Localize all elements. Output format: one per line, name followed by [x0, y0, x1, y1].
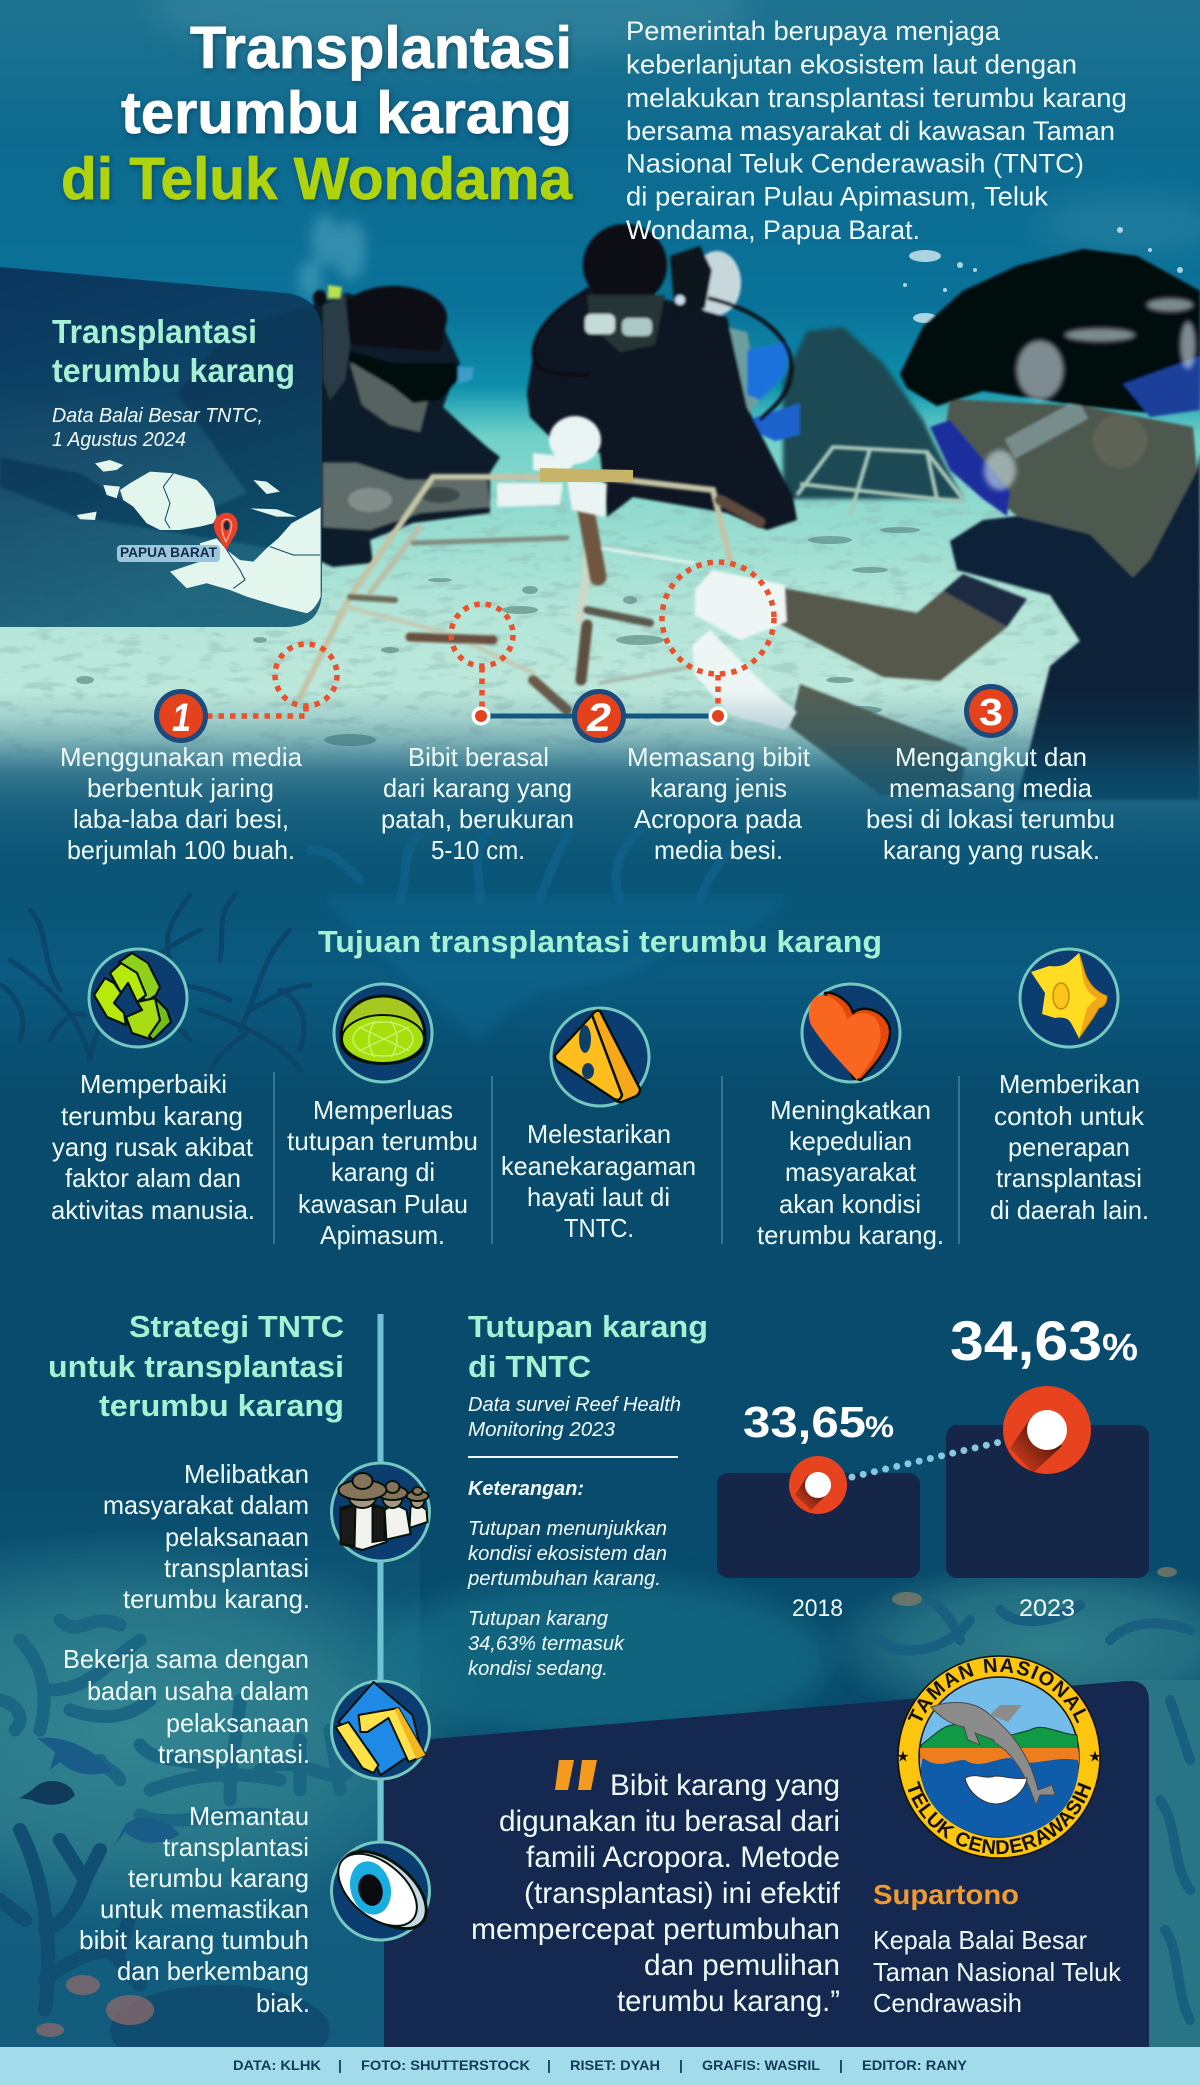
- step 4 text: besi di lokasi terumbu: [866, 804, 1115, 834]
- diver right: [780, 249, 1200, 800]
- icon: community people: [332, 1463, 430, 1561]
- coral cover notes: kondisi sedang.: [468, 1658, 608, 1680]
- goal 3 text: keanekaragaman: [501, 1151, 696, 1181]
- map of Papua: [77, 460, 321, 613]
- goal 4 text: terumbu karang.: [757, 1220, 944, 1250]
- coral silhouettes: upper band: [0, 830, 740, 1070]
- quote text: (transplantasi) ini efektif: [524, 1877, 841, 1910]
- goal 4 text: [757, 1095, 944, 1250]
- quote text: Bibit karang yang: [610, 1769, 840, 1802]
- strategy 3 text: untuk memastikan: [100, 1894, 309, 1924]
- strategy 2 text: pelaksanaan: [166, 1708, 309, 1738]
- footer credits: FOTO: SHUTTERSTOCK: [361, 2057, 530, 2073]
- footer credits: |: [338, 2057, 342, 2073]
- strategy 1 text: Melibatkan: [184, 1459, 309, 1489]
- quote text: mempercepat pertumbuhan: [471, 1913, 840, 1946]
- quote text: terumbu karang.”: [617, 1985, 840, 2018]
- coral cover notes: 34,63% termasuk: [468, 1633, 625, 1655]
- frame and corals: [300, 477, 760, 710]
- step 1 text: berjumlah 100 buah.: [67, 835, 295, 865]
- panel source note: [52, 405, 263, 451]
- intro paragraph: Nasional Teluk Cenderawasih (TNTC): [626, 148, 1084, 178]
- speaker name: Supartono: [873, 1879, 1019, 1910]
- strategy 1 text: transplantasi: [164, 1553, 309, 1583]
- speaker role: Kepala Balai Besar: [873, 1925, 1087, 1955]
- footer credits: DATA: KLHK: [233, 2057, 321, 2073]
- logo: Taman Nasional Teluk Cenderawasih: TAMAN NASIONAL: [908, 1658, 1086, 1724]
- right gloves: [692, 570, 797, 730]
- step 2 text: [381, 742, 574, 865]
- reef shape behind heading: [320, 895, 790, 1040]
- footer credits: RISET: DYAH: [570, 2057, 660, 2073]
- badge 1: [154, 689, 208, 743]
- strategy 3 text: terumbu karang: [128, 1863, 309, 1893]
- goal 1 text: Memperbaiki: [80, 1069, 227, 1099]
- badge 1: 1: [172, 696, 191, 740]
- goal 3 text: [501, 1119, 696, 1243]
- heading: coral cover: [468, 1309, 708, 1384]
- footer credits: |: [547, 2057, 551, 2073]
- dark coral bottom left: [0, 1830, 140, 2010]
- strategy 1 text: masyarakat dalam: [103, 1490, 309, 1520]
- marker 2018: [789, 1456, 847, 1514]
- underwater photo of divers: [0, 0, 1200, 900]
- icon: recycle: [89, 949, 187, 1047]
- title: terumbu karang: [121, 80, 572, 146]
- intro paragraph: [626, 16, 1127, 245]
- goal 1 text: aktivitas manusia.: [51, 1195, 255, 1225]
- quote text: famili Acropora. Metode: [526, 1841, 840, 1874]
- goal 3 text: Melestarikan: [527, 1119, 671, 1149]
- goal 2 text: karang di: [331, 1157, 435, 1187]
- white gloves: [497, 416, 607, 517]
- value 2023: 34,63: [950, 1309, 1102, 1372]
- panel heading: terumbu karang: [52, 352, 295, 389]
- trend dots: [852, 1442, 1000, 1477]
- strategy 3 text: transplantasi: [163, 1832, 309, 1862]
- coral cover source: Data survei Reef Health: [468, 1394, 681, 1416]
- panel source note: 1 Agustus 2024: [52, 429, 186, 451]
- goal 5 text: transplantasi: [996, 1163, 1142, 1193]
- icon: eye: [325, 1836, 440, 1944]
- goal 2 text: tutupan terumbu: [287, 1126, 478, 1156]
- goal 4 text: akan kondisi: [779, 1189, 921, 1219]
- heading: coral cover: di TNTC: [468, 1349, 591, 1384]
- coral: fan branches: [0, 1620, 350, 1821]
- intro paragraph: melakukan transplantasi terumbu karang: [626, 83, 1127, 113]
- intro paragraph: Wondama, Papua Barat.: [626, 215, 920, 245]
- goal 4 text: masyarakat: [785, 1157, 917, 1187]
- footer credits: EDITOR: RANY: [862, 2057, 968, 2073]
- speaker role: [873, 1925, 1122, 2018]
- year labels: 2023: [1019, 1595, 1075, 1622]
- map label: PAPUA BARAT: [120, 545, 218, 560]
- logo: Taman Nasional Teluk Cenderawasih: TELUK CENDERAWASIH: [908, 1780, 1092, 1854]
- heading: strategy: Strategi TNTC: [129, 1309, 344, 1344]
- step 4 text: karang yang rusak.: [883, 835, 1100, 865]
- coral cover notes: Keterangan:: [468, 1478, 584, 1500]
- strategy 2 text: badan usaha dalam: [87, 1676, 309, 1706]
- value 2018: %: [865, 1411, 894, 1444]
- badge 2: [572, 689, 626, 743]
- goal 3 text: hayati laut di: [527, 1182, 670, 1212]
- goal 2 text: [287, 1095, 478, 1250]
- badge 3: [964, 684, 1018, 738]
- quote text: dan pemulihan: [644, 1949, 840, 1982]
- title: di Teluk Wondama: [61, 146, 573, 212]
- step 3 text: media besi.: [654, 835, 783, 865]
- coral cover notes: Tutupan karang: [468, 1608, 608, 1630]
- step 1 text: laba-laba dari besi,: [73, 804, 289, 834]
- panel: map: [0, 267, 322, 627]
- panel heading: Transplantasi: [52, 313, 257, 350]
- badge 3: 3: [979, 692, 1003, 734]
- intro paragraph: keberlanjutan ekosistem laut dengan: [626, 50, 1077, 80]
- sand specks: [76, 527, 944, 746]
- coral cover notes: kondisi ekosistem dan: [468, 1543, 667, 1565]
- step 3 text: [627, 742, 811, 865]
- logo: Taman Nasional Teluk Cenderawasih: [896, 1655, 1102, 1859]
- title: [61, 15, 573, 212]
- panel: quote: [384, 1681, 1149, 2047]
- marker 2023: [1003, 1386, 1091, 1474]
- step 4 text: [866, 742, 1115, 865]
- coral cover source: [468, 1394, 681, 1441]
- year labels: 2018: [792, 1595, 843, 1622]
- goal 1 text: faktor alam dan: [65, 1163, 241, 1193]
- fish silhouettes: [37, 1737, 180, 1845]
- intro paragraph: Pemerintah berupaya menjaga: [626, 16, 1001, 46]
- lower fade of the photo: [0, 690, 1200, 896]
- goal 2 text: kawasan Pulau: [298, 1189, 468, 1219]
- title: Transplantasi: [190, 15, 572, 81]
- icon: handshake: [332, 1681, 430, 1779]
- heading: goals: Tujuan transplantasi terumbu karang: [318, 924, 882, 959]
- footer credits: |: [839, 2057, 843, 2073]
- strategy 3 text: Memantau: [189, 1801, 309, 1831]
- quote text: [471, 1769, 841, 2018]
- coral reef bottom background: [0, 1480, 1200, 2075]
- timeline line: [378, 1314, 384, 1894]
- panel heading: [52, 313, 295, 389]
- sand texture: [0, 470, 1200, 760]
- strategy 2 text: transplantasi.: [158, 1739, 310, 1769]
- icon: star: [1020, 949, 1118, 1047]
- strategy 1 text: [103, 1459, 310, 1614]
- strategy 3 text: [79, 1801, 310, 2018]
- bubbles: [298, 214, 366, 300]
- coral cover notes: pertumbuhan karang.: [467, 1568, 661, 1590]
- strategy 3 text: dan berkembang: [117, 1956, 309, 1986]
- step 3 text: Acropora pada: [634, 804, 803, 834]
- goal 5 text: Memberikan: [999, 1069, 1140, 1099]
- goal 2 text: Apimasum.: [320, 1220, 445, 1250]
- icon: warning triangle: [551, 1008, 649, 1106]
- step 2 text: Bibit berasal: [408, 742, 549, 772]
- heading: coral cover: Tutupan karang: [468, 1309, 708, 1344]
- step 3 text: karang jenis: [650, 773, 787, 803]
- goal 4 text: Meningkatkan: [770, 1095, 931, 1125]
- value 2023: %: [1102, 1327, 1138, 1369]
- coral cover source: Monitoring 2023: [468, 1419, 615, 1441]
- goal 1 text: terumbu karang: [61, 1101, 243, 1131]
- step 1 text: berbentuk jaring: [87, 773, 274, 803]
- panel source note: Data Balai Besar TNTC,: [52, 405, 263, 427]
- heading: strategy: terumbu karang: [99, 1388, 344, 1423]
- icon: heart: [802, 984, 900, 1082]
- connector line step 2: [472, 706, 728, 726]
- goal 5 text: [990, 1069, 1149, 1225]
- chart: coral cover bars: [717, 1309, 1149, 1622]
- quote mark: [555, 1760, 597, 1790]
- diver middle: [527, 224, 800, 530]
- strategy 2 text: [63, 1644, 310, 1769]
- speaker role: Cendrawasih: [873, 1988, 1022, 2018]
- goal 1 text: [51, 1069, 255, 1225]
- goal 3 text: TNTC.: [564, 1213, 634, 1243]
- step 3 text: Memasang bibit: [627, 742, 811, 772]
- heading: strategy: [48, 1309, 344, 1423]
- speaker role: Taman Nasional Teluk: [873, 1957, 1122, 1987]
- intro paragraph: bersama masyarakat di kawasan Taman: [626, 116, 1115, 146]
- diver left: [0, 285, 500, 567]
- step 2 text: 5-10 cm.: [431, 835, 525, 865]
- step 4 text: memasang media: [889, 773, 1093, 803]
- strategy 2 text: Bekerja sama dengan: [63, 1644, 309, 1674]
- step 1 text: [60, 742, 303, 865]
- coral cover notes: [467, 1478, 667, 1680]
- logo: Taman Nasional Teluk Cenderawasih: ★: [896, 1748, 910, 1766]
- step 1 text: Menggunakan media: [60, 742, 303, 772]
- value 2018: 33,65: [743, 1398, 866, 1447]
- goal 1 text: yang rusak akibat: [52, 1132, 254, 1162]
- dotted highlight circles: [207, 562, 774, 716]
- coral right side: [880, 1600, 1190, 2020]
- intro paragraph: di perairan Pulau Apimasum, Teluk: [626, 182, 1049, 212]
- step 2 text: dari karang yang: [383, 773, 572, 803]
- goal 5 text: contoh untuk: [994, 1101, 1145, 1131]
- footer credits: [0, 2047, 1200, 2085]
- footer credits: |: [679, 2057, 683, 2073]
- background coral rock: [783, 327, 963, 499]
- strategy 1 text: pelaksanaan: [165, 1522, 309, 1552]
- footer credits: GRAFIS: WASRIL: [702, 2057, 820, 2073]
- upper reef band: [0, 895, 1200, 1095]
- goal 2 text: Memperluas: [313, 1095, 453, 1125]
- goal 5 text: di daerah lain.: [990, 1195, 1149, 1225]
- step 4 text: Mengangkut dan: [895, 742, 1087, 772]
- step 2 text: patah, berukuran: [381, 804, 574, 834]
- goal 4 text: kepedulian: [789, 1126, 912, 1156]
- strategy 1 text: terumbu karang.: [123, 1584, 310, 1614]
- strategy 3 text: bibit karang tumbuh: [79, 1925, 309, 1955]
- goal 5 text: penerapan: [1008, 1132, 1130, 1162]
- strategy 3 text: biak.: [256, 1988, 310, 2018]
- icon: globe dome: [334, 984, 432, 1082]
- quote text: digunakan itu berasal dari: [499, 1805, 840, 1838]
- logo: Taman Nasional Teluk Cenderawasih: ★: [1088, 1748, 1102, 1766]
- year labels: [792, 1595, 1075, 1622]
- badge 2: 2: [586, 696, 611, 740]
- heading: strategy: untuk transplantasi: [48, 1349, 344, 1384]
- coral cover notes: Tutupan menunjukkan: [468, 1518, 667, 1540]
